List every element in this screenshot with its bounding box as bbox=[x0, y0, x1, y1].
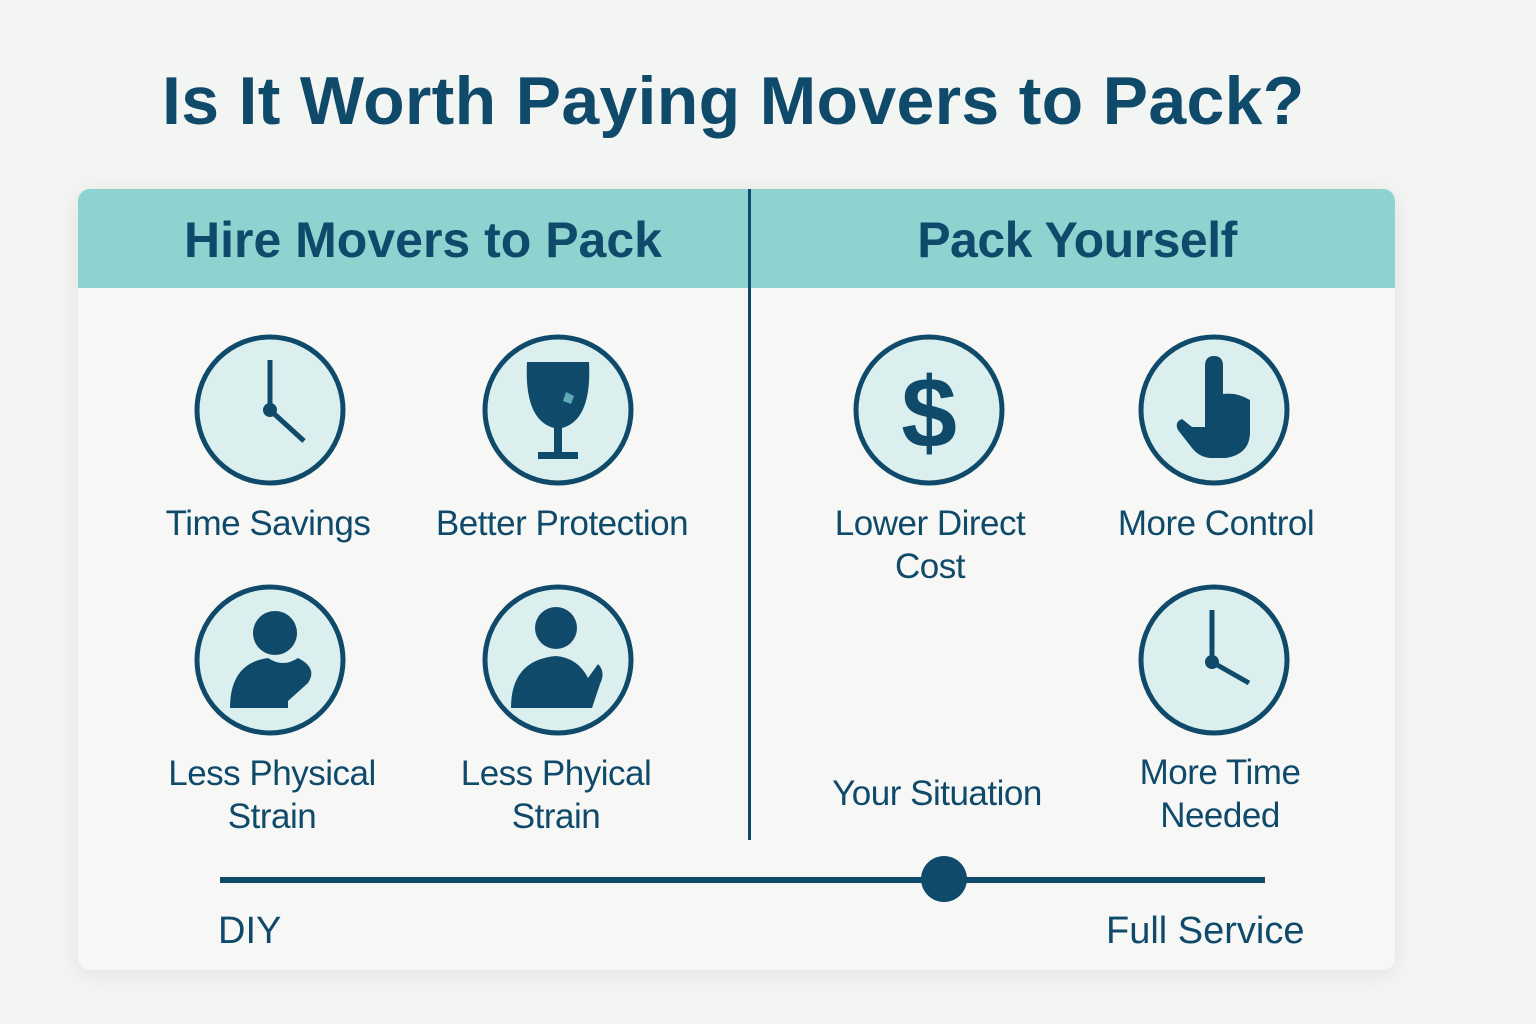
icon: hand bbox=[1141, 337, 1287, 483]
icon: glass bbox=[485, 337, 631, 483]
label: more time needed: More Time bbox=[1140, 753, 1300, 792]
slider bbox=[220, 856, 1265, 902]
icon: person 2 bbox=[485, 587, 631, 733]
label: better protection: Better Protection bbox=[436, 504, 688, 543]
icon: clock 2 bbox=[1141, 587, 1287, 733]
label: DIY: DIY bbox=[218, 910, 281, 952]
icon: clock bbox=[197, 337, 343, 483]
label: more time needed: Needed bbox=[1160, 796, 1280, 835]
title: Is It Worth Paying Movers to Pack? bbox=[162, 63, 1305, 139]
label: more time needed bbox=[1140, 753, 1300, 835]
label: lower direct cost: Cost bbox=[895, 547, 965, 586]
label: full service: Full Service bbox=[1106, 910, 1304, 952]
label: lower direct cost bbox=[835, 504, 1026, 586]
divider bbox=[748, 189, 751, 840]
label: less physical strain: Less Physical bbox=[168, 754, 376, 793]
icon: dollar bbox=[856, 337, 1002, 483]
label: lower direct cost: Lower Direct bbox=[835, 504, 1025, 543]
icon: dollar: $ bbox=[901, 357, 957, 469]
label: time savings: Time Savings bbox=[166, 504, 370, 543]
label: less physical strain bbox=[168, 754, 376, 836]
label: less phyical strain bbox=[461, 754, 651, 836]
label: less phyical strain: Strain bbox=[512, 797, 600, 836]
panel: comparison card bbox=[78, 189, 1395, 970]
label: your situation: Your Situation bbox=[832, 774, 1042, 813]
header band bbox=[78, 189, 1395, 288]
label: less phyical strain: Less Phyical bbox=[461, 754, 651, 793]
heading: pack yourself: Pack Yourself bbox=[917, 212, 1237, 268]
heading: hire movers: Hire Movers to Pack bbox=[184, 212, 662, 268]
label: less physical strain: Strain bbox=[228, 797, 316, 836]
label: more control: More Control bbox=[1118, 504, 1314, 543]
icon: person strain bbox=[197, 587, 343, 733]
